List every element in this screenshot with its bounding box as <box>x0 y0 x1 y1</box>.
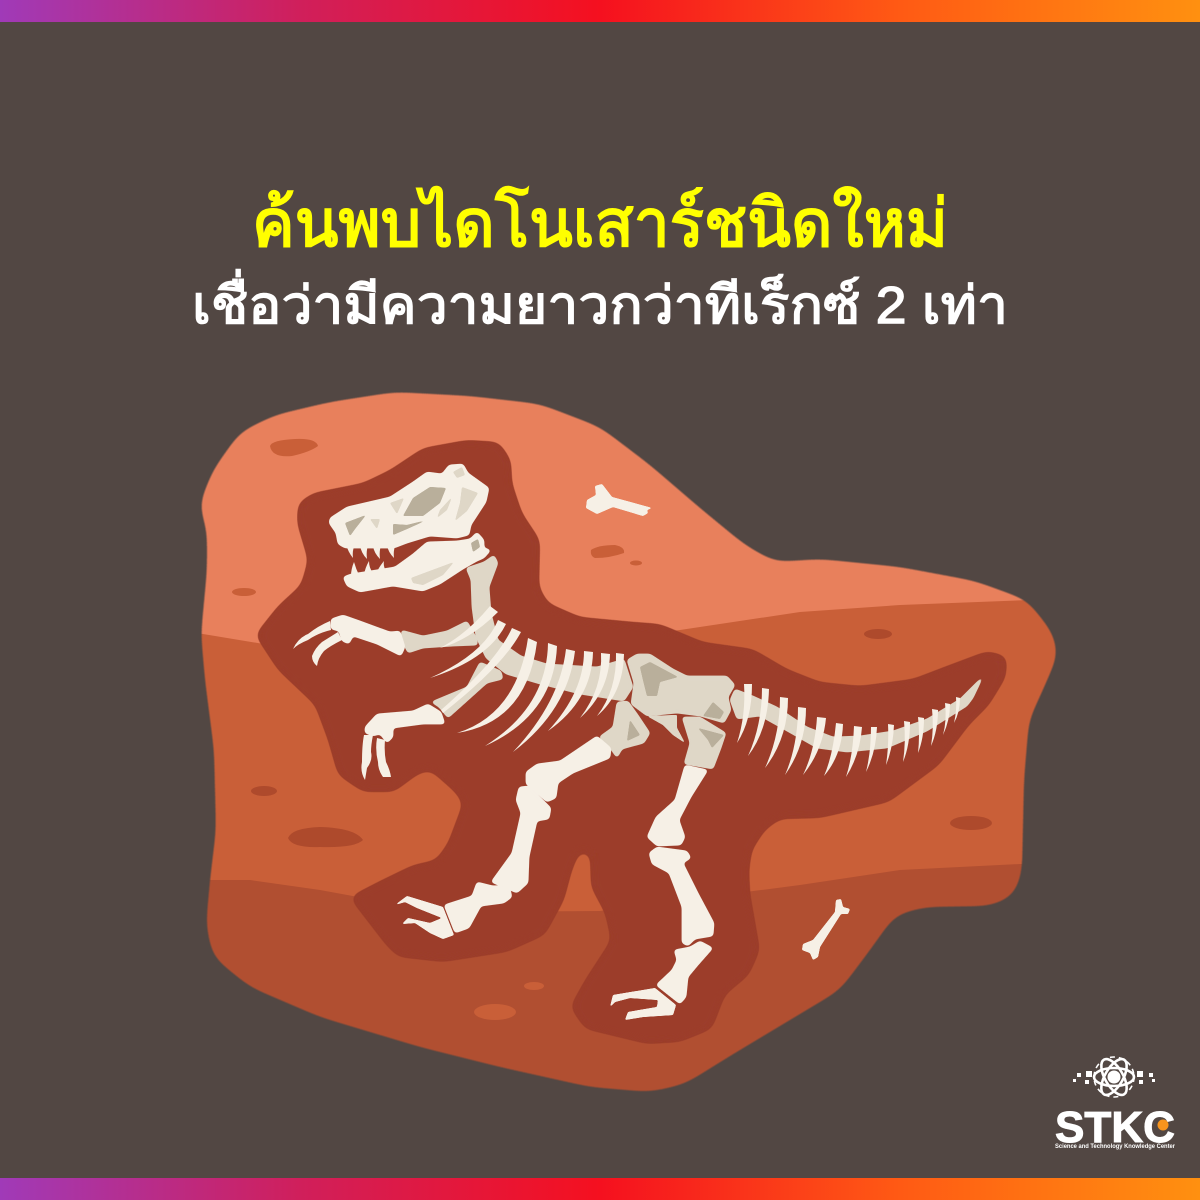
orange dot <box>1158 1120 1168 1130</box>
pelvis <box>599 654 735 769</box>
skeleton <box>293 464 984 1020</box>
atom icon <box>1094 1055 1134 1099</box>
bottom gradient bar <box>0 1178 1200 1200</box>
lower teeth <box>351 561 386 576</box>
illustration: rock with fossil <box>201 392 1056 1092</box>
STKC logo <box>1055 1055 1176 1152</box>
skull <box>329 464 489 559</box>
tagline: Science and Technology Knowledge Center <box>1055 1144 1176 1150</box>
loose bone lower right <box>802 899 850 960</box>
upper teeth <box>346 544 396 559</box>
loose bone upper right <box>586 484 652 516</box>
title: ค้นพบไดโนเสาร์ชนิดใหม่ <box>252 184 948 260</box>
right leg <box>610 765 714 1020</box>
excavation pit <box>255 440 1007 1044</box>
wordmark: STKC <box>1055 1103 1175 1152</box>
neck and spine <box>466 555 633 701</box>
lower jaw <box>343 532 491 592</box>
pixel squares <box>1073 1071 1155 1084</box>
tail <box>730 675 984 777</box>
forearm <box>361 662 503 780</box>
subtitle: เชื่อว่ามีความยาวกว่าทีเร็กซ์ 2 เท่า <box>192 269 1008 335</box>
top gradient bar <box>0 0 1200 22</box>
upper arm <box>293 615 478 666</box>
rock patches <box>232 439 992 1020</box>
ribs <box>430 606 624 752</box>
rock layers <box>201 392 1056 1092</box>
left leg <box>395 736 611 939</box>
